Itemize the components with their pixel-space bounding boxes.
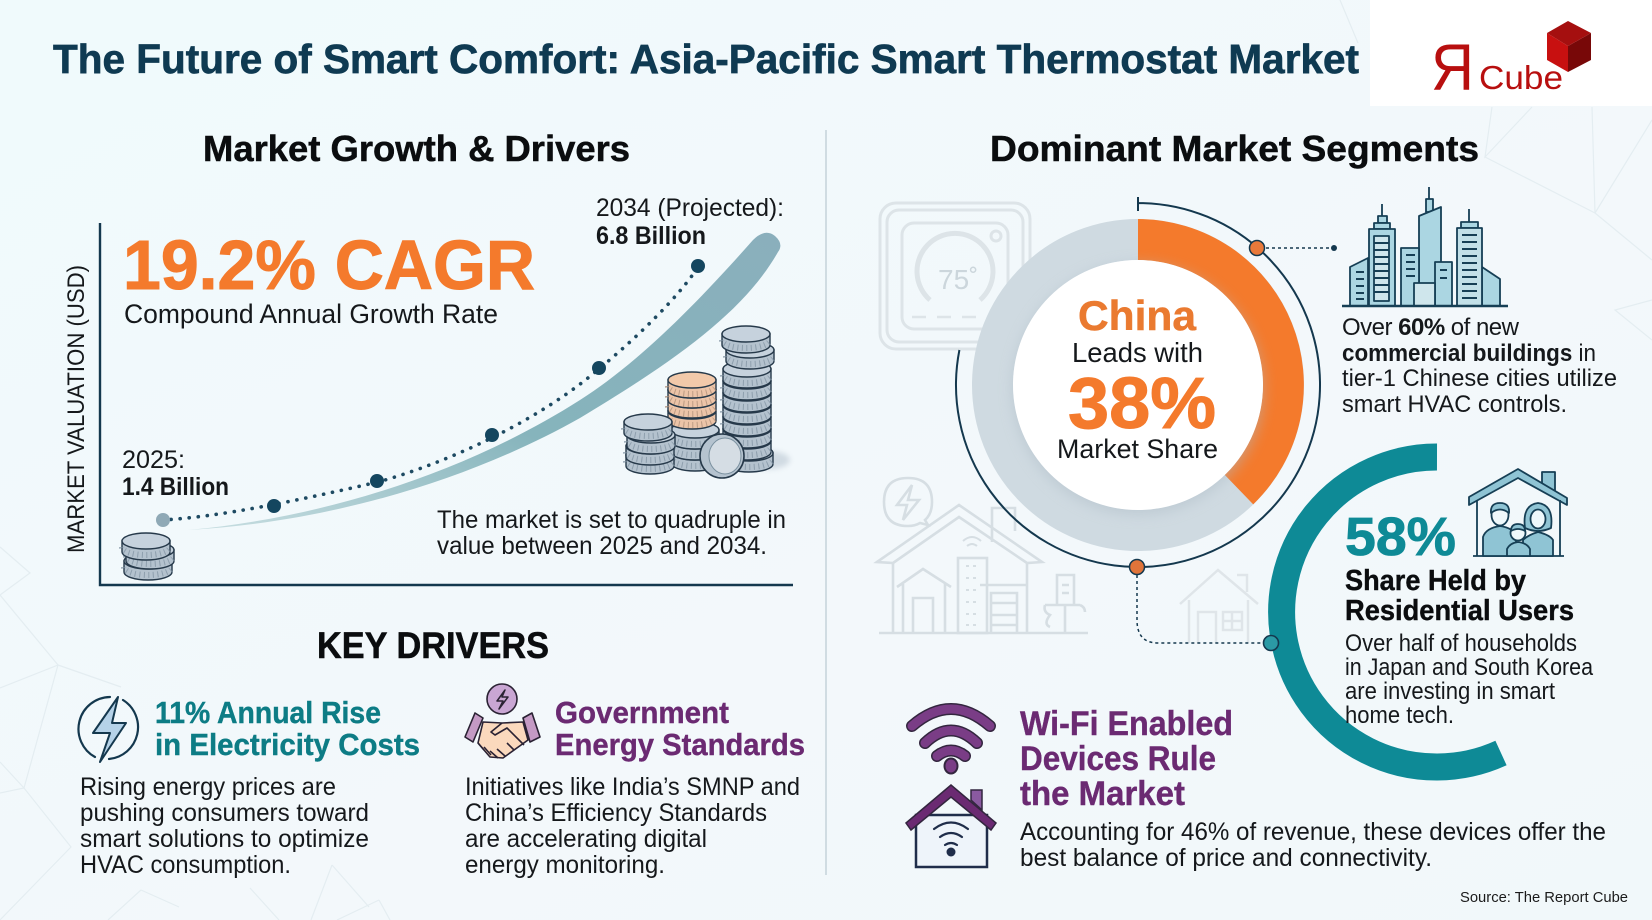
panel: china donut xyxy=(877,197,1337,643)
icon: faded thermostat: 75˚ xyxy=(938,264,978,295)
donut centre xyxy=(1013,260,1263,514)
china label: China xyxy=(1078,292,1197,339)
connector node xyxy=(1264,636,1278,650)
icon: lightning bolt xyxy=(78,697,138,762)
connector to buildings xyxy=(1250,240,1337,256)
body text: China’s Efficiency Standards xyxy=(465,799,767,827)
icon: faded thermostat xyxy=(880,203,1030,349)
body text xyxy=(1020,818,1606,872)
heading: Energy Standards xyxy=(555,727,805,762)
heading: Devices Rule xyxy=(1020,740,1216,778)
2025 label xyxy=(122,446,229,501)
body text xyxy=(1345,630,1594,729)
icon: city skyline xyxy=(1342,187,1508,306)
body text xyxy=(1342,314,1617,418)
heading: key drivers: KEY DRIVERS xyxy=(317,625,549,666)
icon: wi-fi signal xyxy=(912,709,990,774)
body text: Initiatives like India’s SMNP and xyxy=(465,773,800,801)
body text: are investing in smart xyxy=(1345,678,1555,705)
body text: smart solutions to optimize xyxy=(80,825,369,853)
heading: 11% Annual Rise xyxy=(155,695,381,730)
chart axes xyxy=(100,223,793,585)
data points xyxy=(156,259,705,527)
2034 label: 2034 (Projected): xyxy=(596,194,784,222)
panel: growth chart xyxy=(63,194,793,585)
panel: wi-fi devices xyxy=(906,705,1606,872)
body text: smart HVAC controls. xyxy=(1342,391,1567,418)
body text: Over 60% of new xyxy=(1342,314,1520,341)
dotted trend line xyxy=(162,267,698,520)
cagr value: 19.2% CAGR xyxy=(123,226,535,304)
donut track xyxy=(992,240,1284,530)
heading xyxy=(155,695,420,762)
heading: Wi-Fi Enabled xyxy=(1020,705,1233,743)
heading: Share Held by xyxy=(1345,565,1526,597)
panel: commercial buildings xyxy=(1342,187,1617,418)
title: The Future of Smart Comfort: Asia-Pacific Smart Thermostat Market xyxy=(53,36,1359,82)
58 percent: 58% xyxy=(1345,507,1456,567)
icon: large coin stacks xyxy=(624,326,790,478)
body text: energy monitoring. xyxy=(465,851,665,879)
connector to residential xyxy=(1130,560,1264,643)
body text: Rising energy prices are xyxy=(80,773,336,801)
2025 label: 2025: xyxy=(122,446,185,474)
2025 label: 1.4 Billion xyxy=(122,473,229,501)
heading: dominant market segments: Dominant Market Segments xyxy=(990,128,1479,169)
heading xyxy=(1345,565,1574,627)
market note: value between 2025 and 2034. xyxy=(437,532,767,560)
market share: Market Share xyxy=(1057,434,1218,464)
source: Source: The Report Cube xyxy=(1460,889,1628,906)
body text: home tech. xyxy=(1345,702,1454,729)
icon: family house xyxy=(1469,469,1567,556)
heading: market growth and drivers: Market Growth & Drivers xyxy=(203,128,630,169)
cagr label: Compound Annual Growth Rate xyxy=(124,299,498,329)
body text xyxy=(80,773,369,879)
38 percent: 38% xyxy=(1068,364,1216,444)
body text: in Japan and South Korea xyxy=(1345,654,1594,681)
body text: pushing consumers toward xyxy=(80,799,369,827)
heading: in Electricity Costs xyxy=(155,727,420,762)
body text: are accelerating digital xyxy=(465,825,707,853)
panel: residential users xyxy=(1264,457,1594,767)
body text: Accounting for 46% of revenue, these devices offer the xyxy=(1020,818,1606,846)
body text: Over half of households xyxy=(1345,630,1577,657)
icon: faded house and buildings xyxy=(877,478,1088,633)
growth swoosh xyxy=(188,233,780,530)
icon: handshake xyxy=(465,684,540,758)
logo: Cube xyxy=(1479,59,1563,96)
market note: The market is set to quadruple in xyxy=(437,506,786,534)
body text: best balance of price and connectivity. xyxy=(1020,844,1432,872)
2034 label: 6.8 Billion xyxy=(596,222,706,250)
heading: Government xyxy=(555,695,729,730)
body text: tier-1 Chinese cities utilize xyxy=(1342,365,1617,392)
y axis label: MARKET VALUATION (USD) xyxy=(63,265,90,553)
divider xyxy=(825,130,827,875)
panel: electricity costs driver xyxy=(78,695,420,879)
logo xyxy=(1370,0,1652,106)
2034 label xyxy=(596,194,784,250)
market note xyxy=(437,506,786,560)
heading: Residential Users xyxy=(1345,595,1574,627)
leads with: Leads with xyxy=(1072,337,1203,368)
body text: HVAC consumption. xyxy=(80,851,291,879)
body text: commercial buildings in xyxy=(1342,340,1596,367)
body text xyxy=(465,773,800,879)
teal arc xyxy=(1282,457,1501,767)
donut orange segment xyxy=(1138,240,1283,490)
logo: Я xyxy=(1431,30,1474,104)
icon: faded small house xyxy=(1180,570,1258,643)
panel: government standards driver xyxy=(465,684,805,879)
outer thin arc xyxy=(956,197,1320,567)
icon: wi-fi house xyxy=(906,785,996,867)
heading xyxy=(555,695,805,762)
heading: the Market xyxy=(1020,775,1185,813)
icon: small coin stack xyxy=(122,533,174,580)
heading xyxy=(1020,705,1233,813)
